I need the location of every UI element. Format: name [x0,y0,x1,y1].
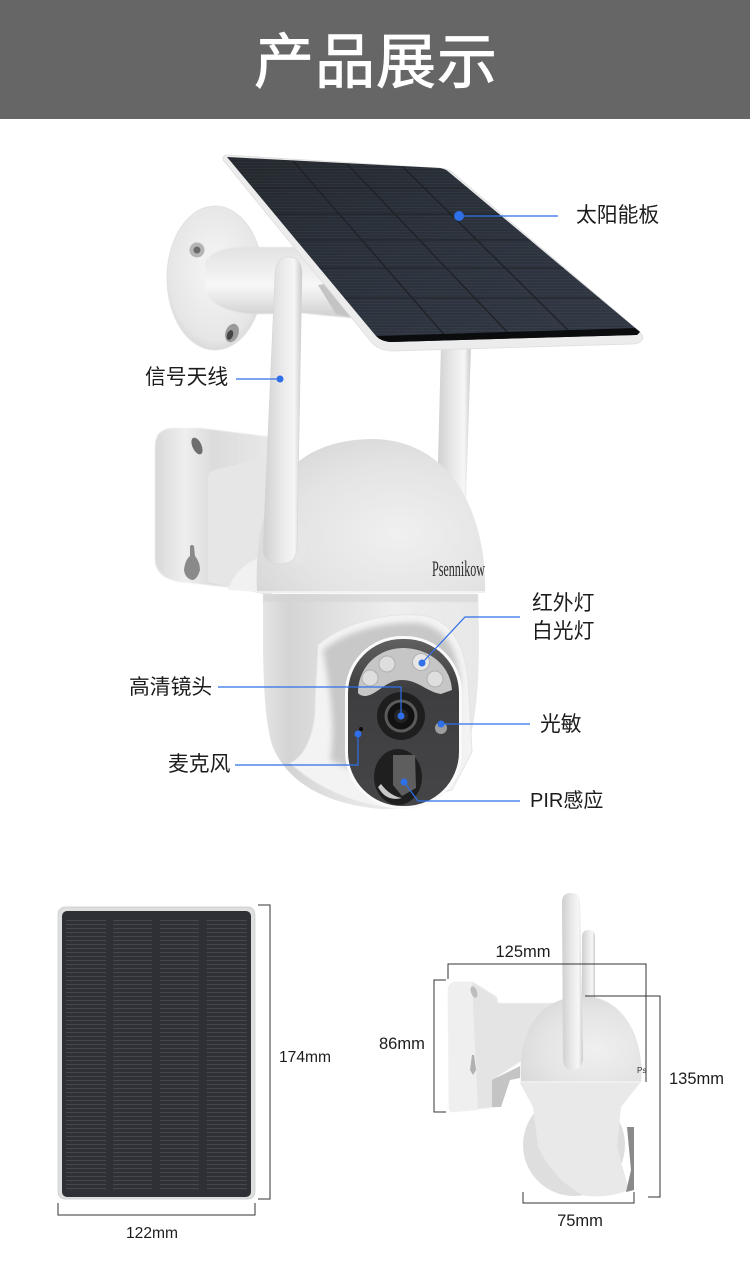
face recess [290,615,472,808]
callout: HD lens: 高清镜头 [129,676,212,699]
dimension: panel width 122mm [58,1203,255,1242]
dimension: camera height 135mm [585,996,724,1197]
wall bracket [155,428,272,596]
light sensor [435,722,447,734]
front antenna [562,893,583,1070]
callout: solar panel: 太阳能板 [576,204,659,227]
callout: solar panel [454,204,659,227]
PIR sensor [374,749,422,805]
dimension: camera width 75mm: 75mm [557,1212,603,1230]
camera dome [257,439,485,593]
panel cell grid [252,161,640,342]
callout: microphone: 麦克风 [168,753,231,776]
brand text: Psennikow [432,556,485,581]
dimension: panel height 174mm [258,905,331,1199]
dimension: camera height 135mm: 135mm [669,1070,724,1088]
callout: light sensor: 光敏 [540,713,582,736]
dimension: camera depth 125mm: 125mm [495,943,551,961]
callout: antenna: 信号天线 [145,366,228,389]
side bracket [448,982,558,1112]
dimension: panel width 122mm: 122mm [126,1225,178,1242]
rear antenna [582,930,595,1005]
dimension: bracket height 86mm [379,980,446,1112]
LED array [358,648,452,696]
camera lower shell [257,592,485,809]
callout: infrared and white LEDs: 白光灯 [532,620,594,643]
callout: light sensor [438,713,582,736]
dimension: camera width 75mm [523,1192,634,1230]
camera side view: Ps [637,1066,646,1075]
back antenna [437,345,471,500]
callout: PIR: PIR感应 [530,789,603,812]
dimension: camera depth 125mm [448,943,646,1082]
header band [0,0,750,119]
solar mount disc [167,206,263,350]
solar mount arm [205,247,356,318]
title: 产品展示 [254,29,498,96]
microphone hole [359,727,363,731]
callout: microphone [168,730,362,776]
dimension: bracket height 86mm: 86mm [379,1035,425,1053]
panel cells [66,920,247,1191]
main camera illustration [155,150,650,809]
solar panel front view [58,907,255,1199]
callout: antenna [145,366,284,389]
callout: infrared and white LEDs: 红外灯 [532,592,594,615]
dimension: panel height 174mm: 174mm [279,1049,331,1066]
camera side view [448,893,646,1196]
callout: infrared and white LEDs [418,592,594,666]
front antenna [263,257,307,565]
camera face module [345,636,462,809]
callout: PIR [400,778,603,812]
lower shell [520,1083,640,1196]
solar panel [220,150,650,351]
dome [521,996,642,1083]
lens [377,692,425,740]
callout: HD lens [129,676,404,720]
